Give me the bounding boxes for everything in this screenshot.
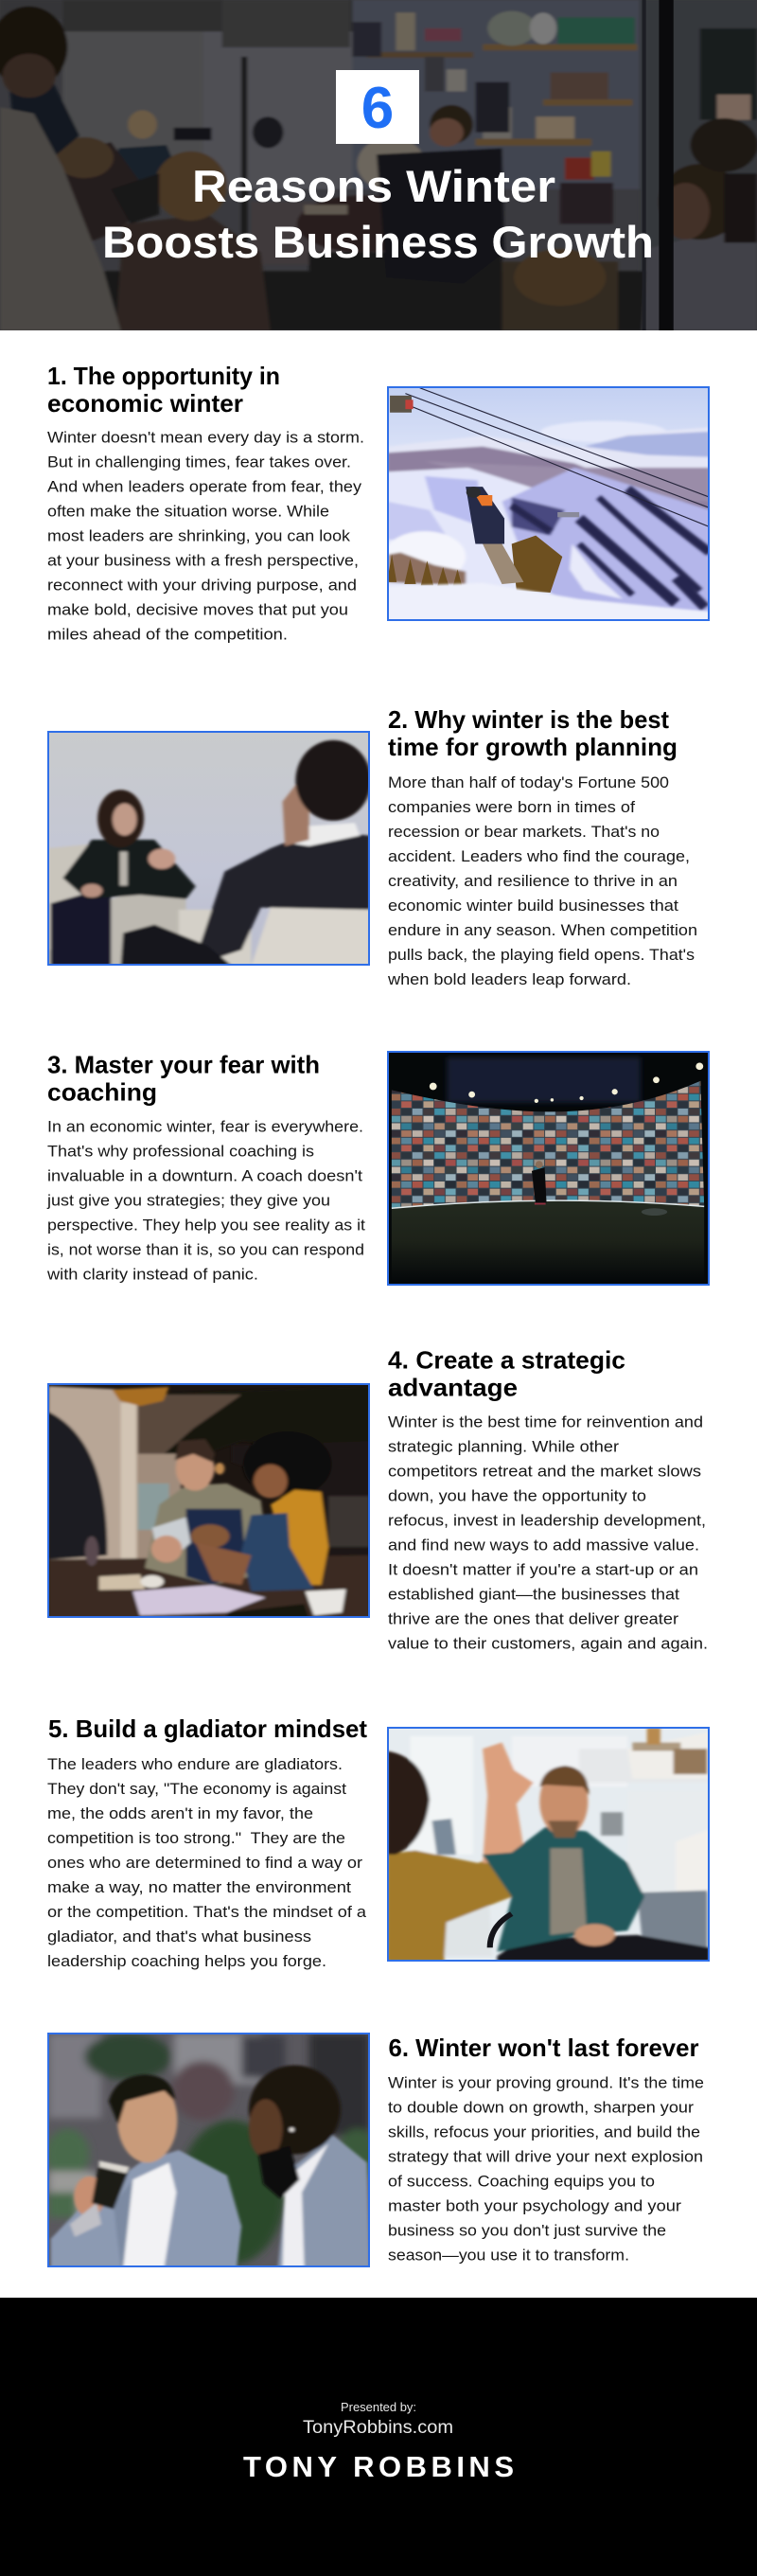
body text 4: strategic planning. While other	[388, 1437, 619, 1456]
heading 4: 4. Create a strategic	[388, 1346, 625, 1375]
website: TonyRobbins.com	[303, 2418, 453, 2438]
body text 4: down, you have the opportunity to	[388, 1486, 646, 1505]
section 2	[47, 705, 697, 988]
body text 5	[47, 1755, 367, 1970]
heading 6: 6. Winter won't last forever	[388, 2034, 698, 2062]
heading 2: time for growth planning	[388, 733, 678, 761]
title: Reasons Winter	[192, 161, 555, 211]
title: Boosts Business Growth	[102, 217, 654, 267]
body text 6: master both your psychology and your	[388, 2196, 681, 2215]
heading 1	[47, 362, 280, 417]
photo border	[48, 2034, 369, 2266]
body text 5: make a way, no matter the environment	[47, 1878, 351, 1896]
body text 4: competitors retreat and the market slows	[388, 1462, 701, 1481]
body text 5: leadership coaching helps you forge.	[47, 1952, 326, 1970]
body text 4: established giant—the businesses that	[388, 1585, 679, 1604]
body text 6	[388, 2073, 704, 2265]
body text 3	[46, 1117, 365, 1284]
heading 4	[388, 1346, 625, 1401]
body text 2: More than half of today's Fortune 500	[388, 773, 669, 791]
photo: colleagues high five	[387, 1727, 710, 1962]
body text 4: refocus, invest in leadership development,	[388, 1511, 706, 1530]
body text 1: make bold, decisive moves that put you	[47, 600, 348, 619]
photo: businessmen with coffee	[45, 2033, 377, 2267]
number badge: 6	[361, 76, 394, 141]
body text 6: skills, refocus your priorities, and build the	[388, 2123, 700, 2141]
body text 6: of success. Coaching equips you to	[388, 2172, 655, 2191]
body text 2: pulls back, the playing field opens. That's	[388, 946, 695, 964]
photo: snowboarder on mountain	[383, 386, 710, 621]
photo border	[48, 1384, 369, 1617]
body text 1: miles ahead of the competition.	[47, 625, 288, 644]
photo: video wall stage	[387, 1051, 710, 1286]
section 3	[46, 1051, 710, 1286]
body text 4: It doesn't matter if you're a start-up or an	[388, 1560, 698, 1579]
body text 6: season—you use it to transform.	[388, 2246, 629, 2265]
body text 1: often make the situation worse. While	[47, 502, 329, 521]
section 5	[47, 1714, 710, 1970]
body text 6: strategy that will drive your next explosion	[388, 2147, 703, 2166]
body text 3: is, not worse than it is, so you can respond	[47, 1240, 364, 1259]
body text 1: reconnect with your driving purpose, and	[47, 576, 357, 595]
body text 4	[388, 1412, 708, 1653]
body text 5: competition is too strong." They are the	[47, 1829, 345, 1847]
body text 5: gladiator, and that's what business	[47, 1928, 311, 1945]
body text 2: endure in any season. When competition	[388, 921, 697, 939]
heading 3: 3. Master your fear with	[47, 1051, 320, 1079]
photo border	[388, 1052, 709, 1285]
body text 6: to double down on growth, sharpen your	[388, 2098, 694, 2117]
body text 2: accident. Leaders who find the courage,	[388, 847, 690, 865]
body text 3: perspective. They help you see reality as it	[47, 1216, 365, 1235]
heading 2: 2. Why winter is the best	[388, 705, 669, 734]
body text 2: when bold leaders leap forward.	[387, 970, 631, 988]
header background photo	[0, 0, 757, 330]
heading 1: economic winter	[47, 389, 243, 417]
presented by: Presented by:	[341, 2400, 416, 2414]
body text 5: The leaders who endure are gladiators.	[47, 1755, 343, 1773]
heading 5: 5. Build a gladiator mindset	[48, 1714, 367, 1743]
body text 5: ones who are determined to find a way or	[47, 1854, 362, 1872]
body text 2: economic winter build businesses that	[388, 897, 678, 915]
body text 3: In an economic winter, fear is everywhere.	[47, 1117, 363, 1136]
body text 5: or the competition. That's the mindset of a	[47, 1903, 367, 1921]
title	[102, 161, 654, 267]
body text 3: That's why professional coaching is	[47, 1142, 314, 1161]
body text 1: at your business with a fresh perspective,	[47, 551, 359, 570]
body text 3: invaluable in a downturn. A coach doesn't	[47, 1166, 362, 1185]
photo border	[48, 732, 369, 965]
body text 5: me, the odds aren't in my favor, the	[47, 1804, 313, 1822]
body text 3: with clarity instead of panic.	[46, 1265, 258, 1284]
heading 4: advantage	[388, 1373, 518, 1401]
logo wordmark: TONY ROBBINS	[243, 2450, 514, 2483]
body text 2: creativity, and resilience to thrive in an	[388, 872, 678, 890]
section 4	[47, 1346, 708, 1653]
body text 2: recession or bear markets. That's no	[388, 823, 660, 841]
heading 3: coaching	[47, 1077, 157, 1106]
heading 1: 1. The opportunity in	[47, 362, 280, 390]
body text 4: thrive are the ones that deliver greater	[388, 1609, 678, 1628]
number badge	[336, 70, 419, 144]
heading 3	[47, 1051, 320, 1106]
body text 1: But in challenging times, fear takes over.	[47, 453, 351, 471]
body text 2	[387, 773, 697, 988]
heading 2	[388, 705, 678, 761]
photo: coaching session	[47, 731, 371, 966]
body text 1: And when leaders operate from fear, they	[47, 477, 362, 496]
body text 5: They don't say, "The economy is against	[47, 1780, 346, 1798]
body text 4: value to their customers, again and again.	[388, 1634, 708, 1653]
photo border	[388, 387, 709, 620]
body text 6: business so you don't just survive the	[388, 2221, 666, 2240]
section 1	[47, 362, 710, 644]
footer	[0, 2298, 757, 2576]
body text 6: Winter is your proving ground. It's the time	[388, 2073, 704, 2092]
body text 4: and find new ways to add massive value.	[388, 1536, 699, 1554]
header banner	[0, 0, 757, 330]
body text 4: Winter is the best time for reinvention and	[388, 1412, 703, 1431]
body text 3: just give you strategies; they give you	[46, 1191, 330, 1210]
section 6	[45, 2033, 704, 2267]
photo: cafe owners with tablet	[47, 1383, 370, 1618]
body text 1: most leaders are shrinking, you can look	[47, 526, 351, 545]
body text 1	[47, 428, 364, 644]
photo border	[388, 1728, 709, 1961]
body text 2: companies were born in times of	[388, 798, 635, 816]
body text 1: Winter doesn't mean every day is a storm.	[47, 428, 364, 447]
